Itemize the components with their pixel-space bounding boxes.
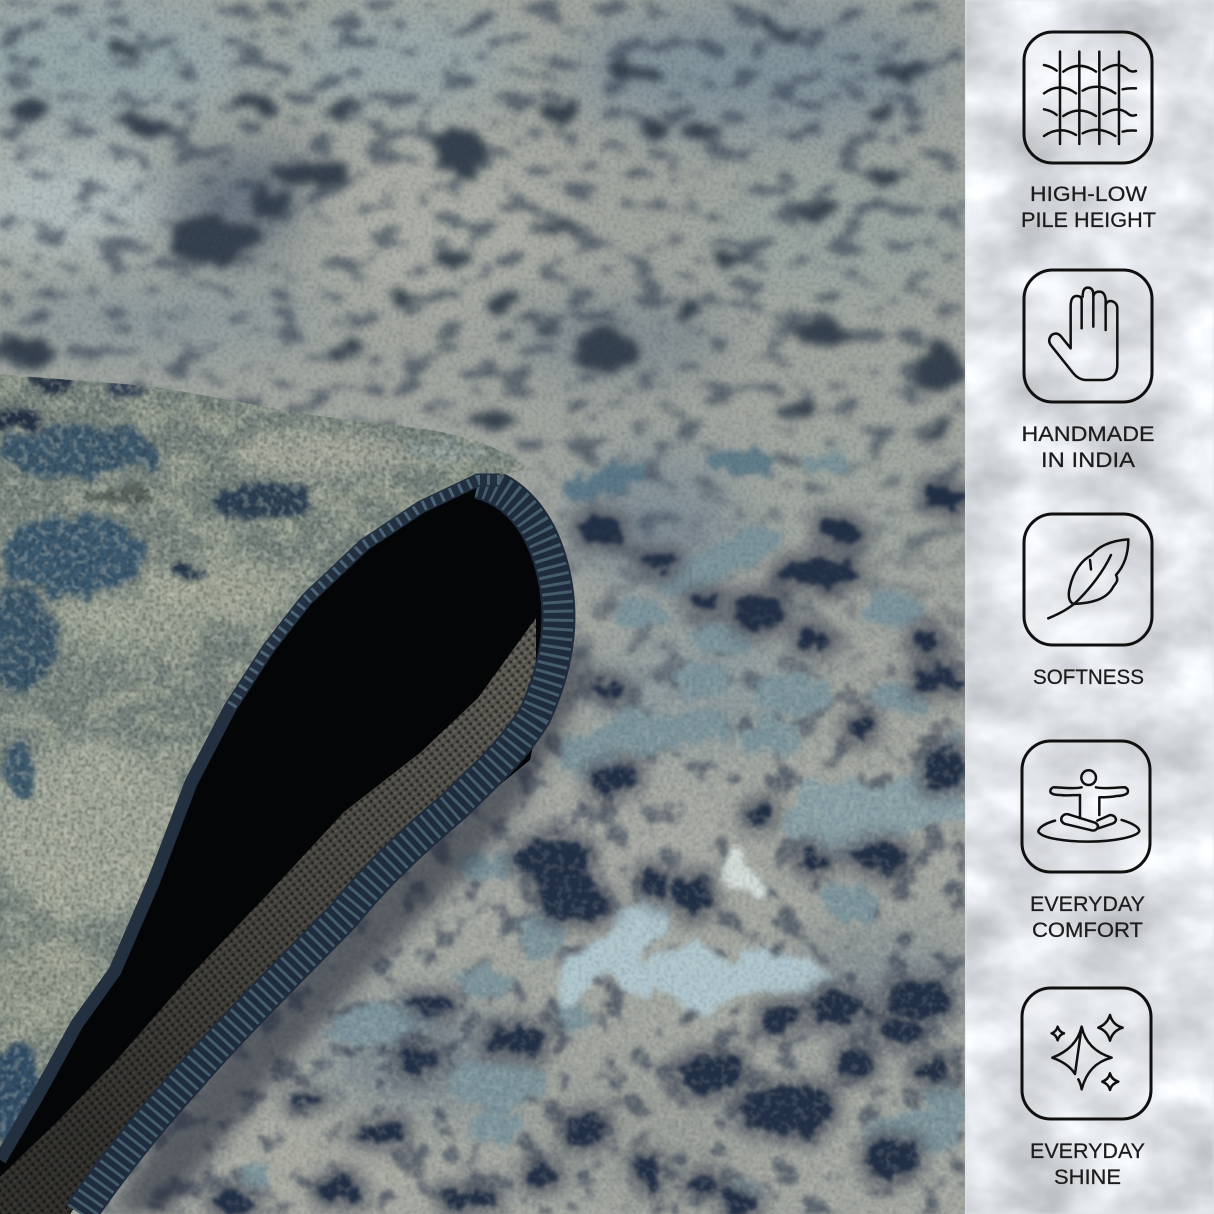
rolled rug: cast shadow bbox=[110, 640, 586, 1214]
feature: softness bbox=[1024, 514, 1152, 689]
mid-tone teal pile tufts bbox=[239, 448, 967, 1202]
label: handmade in India: IN INDIA bbox=[1041, 449, 1135, 472]
icon: feather bbox=[1024, 514, 1152, 645]
icon: woven pile bbox=[1024, 32, 1152, 163]
soft tonal zones bbox=[0, 0, 970, 1214]
icon: hand bbox=[1024, 270, 1152, 402]
feature: handmade in India bbox=[1022, 270, 1154, 472]
rolled rug: lower bound edge bbox=[80, 482, 558, 1214]
fine pile grain bbox=[103, 579, 965, 1214]
pale tuft bbox=[720, 847, 770, 900]
large teal patch bbox=[780, 727, 963, 860]
label: everyday shine: SHINE bbox=[1054, 1166, 1121, 1189]
noise specks bbox=[0, 0, 965, 696]
icon: sparkles bbox=[1022, 988, 1151, 1119]
label: handmade in India: HANDMADE bbox=[1022, 423, 1154, 446]
rolled rug: dark opening bbox=[0, 480, 560, 1214]
light patch bbox=[560, 897, 830, 1017]
panel: features sidebar bbox=[965, 0, 1214, 1214]
background: rug texture photo bbox=[0, 0, 970, 1214]
label: everyday comfort: EVERYDAY bbox=[1030, 893, 1145, 916]
blurred upper pile marks bbox=[0, 22, 962, 438]
feature: everyday comfort bbox=[1022, 741, 1150, 942]
icon: meditating figure bbox=[1022, 741, 1150, 872]
navy pile marks bbox=[210, 484, 965, 1214]
feature: high-low pile height bbox=[1021, 32, 1156, 232]
feature: everyday shine bbox=[1022, 988, 1151, 1189]
label: everyday shine: EVERYDAY bbox=[1030, 1140, 1145, 1163]
rolled rug: upper bound edge bbox=[0, 480, 500, 1160]
label: high-low pile height: HIGH-LOW bbox=[1030, 183, 1147, 206]
rolled rug: top pile surface bbox=[0, 374, 528, 1147]
label: high-low pile height: PILE HEIGHT bbox=[1021, 209, 1156, 232]
label: everyday comfort: COMFORT bbox=[1032, 919, 1143, 942]
backing shading bbox=[0, 618, 536, 1214]
rolled rug: backing underside bbox=[0, 618, 536, 1214]
label: softness: SOFTNESS bbox=[1033, 666, 1144, 689]
